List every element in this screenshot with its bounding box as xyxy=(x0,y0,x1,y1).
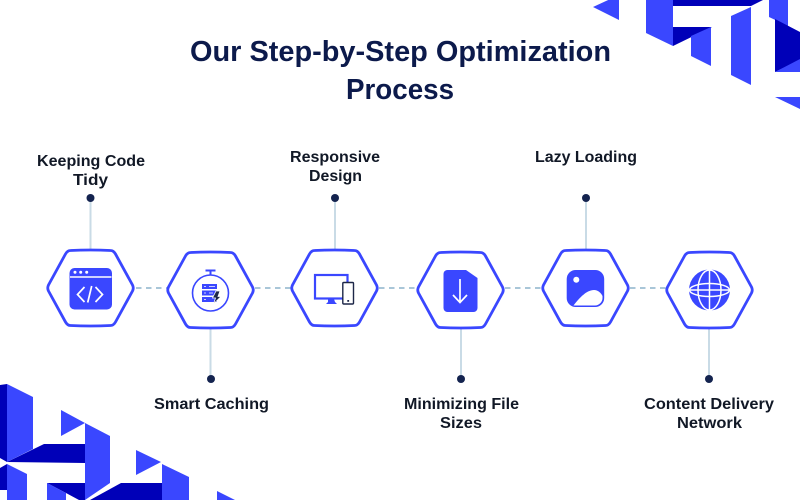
hexagon 1 xyxy=(48,250,133,326)
hexagon 6 xyxy=(667,252,752,328)
hexagon 5 xyxy=(543,250,628,326)
label: Sizes xyxy=(440,415,482,432)
icon: monitor and phone xyxy=(315,275,354,304)
decoration: bottom-left geometric shapes xyxy=(0,384,235,500)
step 6: Content Delivery Network xyxy=(644,252,774,432)
label: Lazy Loading xyxy=(535,149,637,166)
title xyxy=(190,36,611,106)
label xyxy=(290,149,380,185)
step 5: Lazy Loading xyxy=(535,149,637,326)
hexagon 3 xyxy=(292,250,377,326)
label: Content Delivery xyxy=(644,396,774,413)
icon: image xyxy=(567,270,604,307)
step 4: Minimizing File Sizes xyxy=(404,252,519,432)
title: Our Step-by-Step Optimization xyxy=(190,36,611,68)
step 3: Responsive Design xyxy=(290,149,380,326)
connector lines xyxy=(90,198,709,379)
hexagon 4 xyxy=(418,252,503,328)
icon: file download xyxy=(444,270,478,312)
icon: stopwatch with server xyxy=(192,270,228,311)
icon: code window xyxy=(70,268,112,310)
label: Smart Caching xyxy=(154,396,269,413)
label: Responsive xyxy=(290,149,380,166)
title: Process xyxy=(346,74,454,106)
label xyxy=(37,153,145,189)
label: Keeping Code xyxy=(37,153,145,170)
decoration: top-right geometric shapes xyxy=(593,0,800,109)
label xyxy=(404,396,519,432)
label: Design xyxy=(309,168,362,185)
step 2: Smart Caching xyxy=(154,252,269,413)
hexagon 2 xyxy=(168,252,253,328)
label xyxy=(644,396,774,432)
icon: globe xyxy=(689,270,730,310)
label: Network xyxy=(677,415,742,432)
label: Tidy xyxy=(73,172,108,189)
marker dots xyxy=(86,194,713,383)
label: Minimizing File xyxy=(404,396,519,413)
step 1: Keeping Code Tidy xyxy=(37,153,145,326)
